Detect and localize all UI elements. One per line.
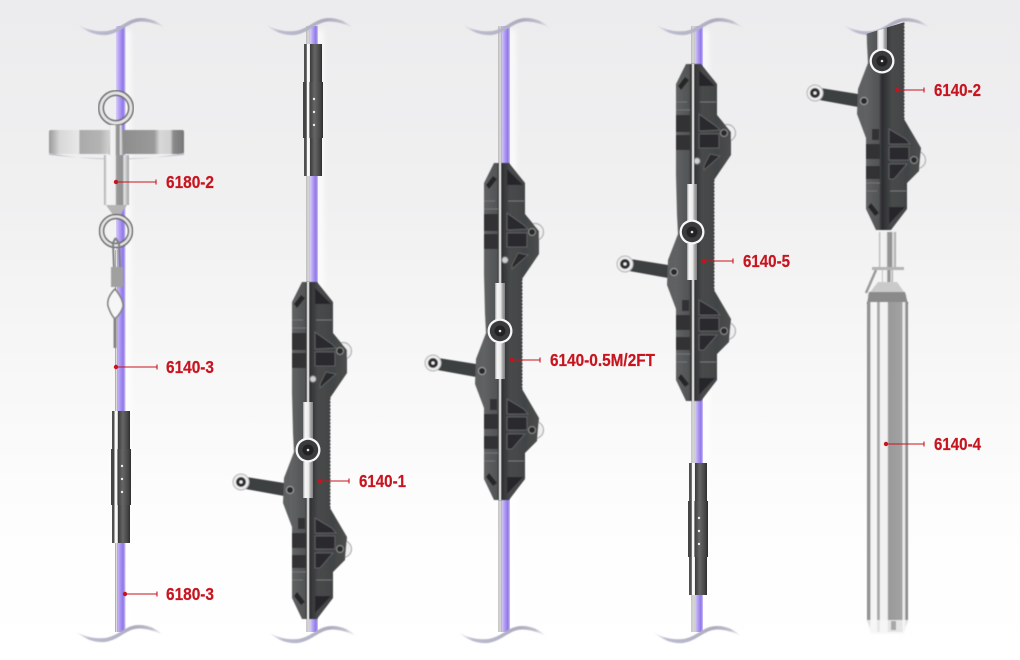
clamp centre: [296, 402, 320, 498]
column 5: clamp 6140-2 with weight 6140-4: [807, 0, 930, 634]
wire through clamp: [498, 162, 502, 500]
label: 6140-3: [114, 357, 214, 377]
cylinder weight: [866, 302, 909, 634]
clamp centre: [680, 184, 704, 280]
column 3: line clamp 6140-0.5M/2FT: [425, 18, 550, 643]
line glow: [125, 30, 130, 630]
clamp stub: [807, 0, 926, 230]
magnet disc release: [49, 130, 184, 160]
label: 6140-1: [318, 471, 406, 491]
label: 6180-2: [114, 172, 214, 192]
silver wire: [692, 26, 694, 632]
clamp body: [233, 282, 352, 619]
label: 6140-1: 6140-1: [359, 471, 406, 491]
label: 6140-0.5M/2FT: [510, 350, 655, 370]
purple line: [502, 26, 510, 632]
line glow: [318, 30, 323, 630]
wire through clamp: [306, 282, 310, 620]
silver wire: [115, 250, 117, 632]
line glow: [703, 30, 708, 630]
label: 6140-3: 6140-3: [166, 357, 214, 377]
label: 6140-2: [895, 80, 981, 100]
silver wire: [306, 26, 310, 632]
top wave: [77, 18, 165, 35]
top wave: [265, 18, 353, 35]
clamp centre: [488, 283, 512, 379]
column 4: line clamp 6140-5 and sleeve: [617, 18, 743, 643]
line sleeve: [111, 411, 131, 543]
label: 6140-5: 6140-5: [743, 251, 790, 271]
label: 6140-0.5M/2FT: 6140-0.5M/2FT: [550, 350, 655, 370]
neck and clip: [866, 232, 908, 304]
bottom wave: [75, 625, 163, 642]
wire through clamp: [692, 64, 694, 402]
label: 6140-4: [884, 434, 981, 454]
column 1: swivel, line and sleeve assembly: [49, 18, 184, 642]
label: 6180-3: [123, 584, 214, 604]
top ring: [101, 93, 131, 123]
label: 6140-4: 6140-4: [934, 434, 981, 454]
sleeve: [303, 44, 323, 176]
purple line: [695, 26, 703, 632]
swivel barrel: [104, 125, 129, 215]
silver wire: [498, 26, 502, 632]
top wave: [655, 18, 743, 35]
bottom wave: [458, 626, 546, 643]
top wave: [842, 18, 930, 35]
snap link: [108, 238, 123, 348]
sleeve: [688, 463, 708, 595]
clamp body: [425, 163, 544, 500]
purple line: [116, 26, 126, 632]
label: 6140-5: [702, 251, 790, 271]
top wave: [462, 18, 550, 35]
bottom wave: [653, 626, 741, 643]
clamp body: [617, 64, 736, 401]
column 2: sleeve and line clamp 6140-1: [233, 18, 356, 643]
purple line: [310, 26, 318, 632]
lower ring: [102, 216, 130, 246]
label: 6180-2: 6180-2: [166, 172, 214, 192]
label: 6180-3: 6180-3: [166, 584, 214, 604]
line glow: [510, 30, 515, 630]
label: 6140-2: 6140-2: [934, 80, 981, 100]
bottom wave: [268, 626, 356, 643]
